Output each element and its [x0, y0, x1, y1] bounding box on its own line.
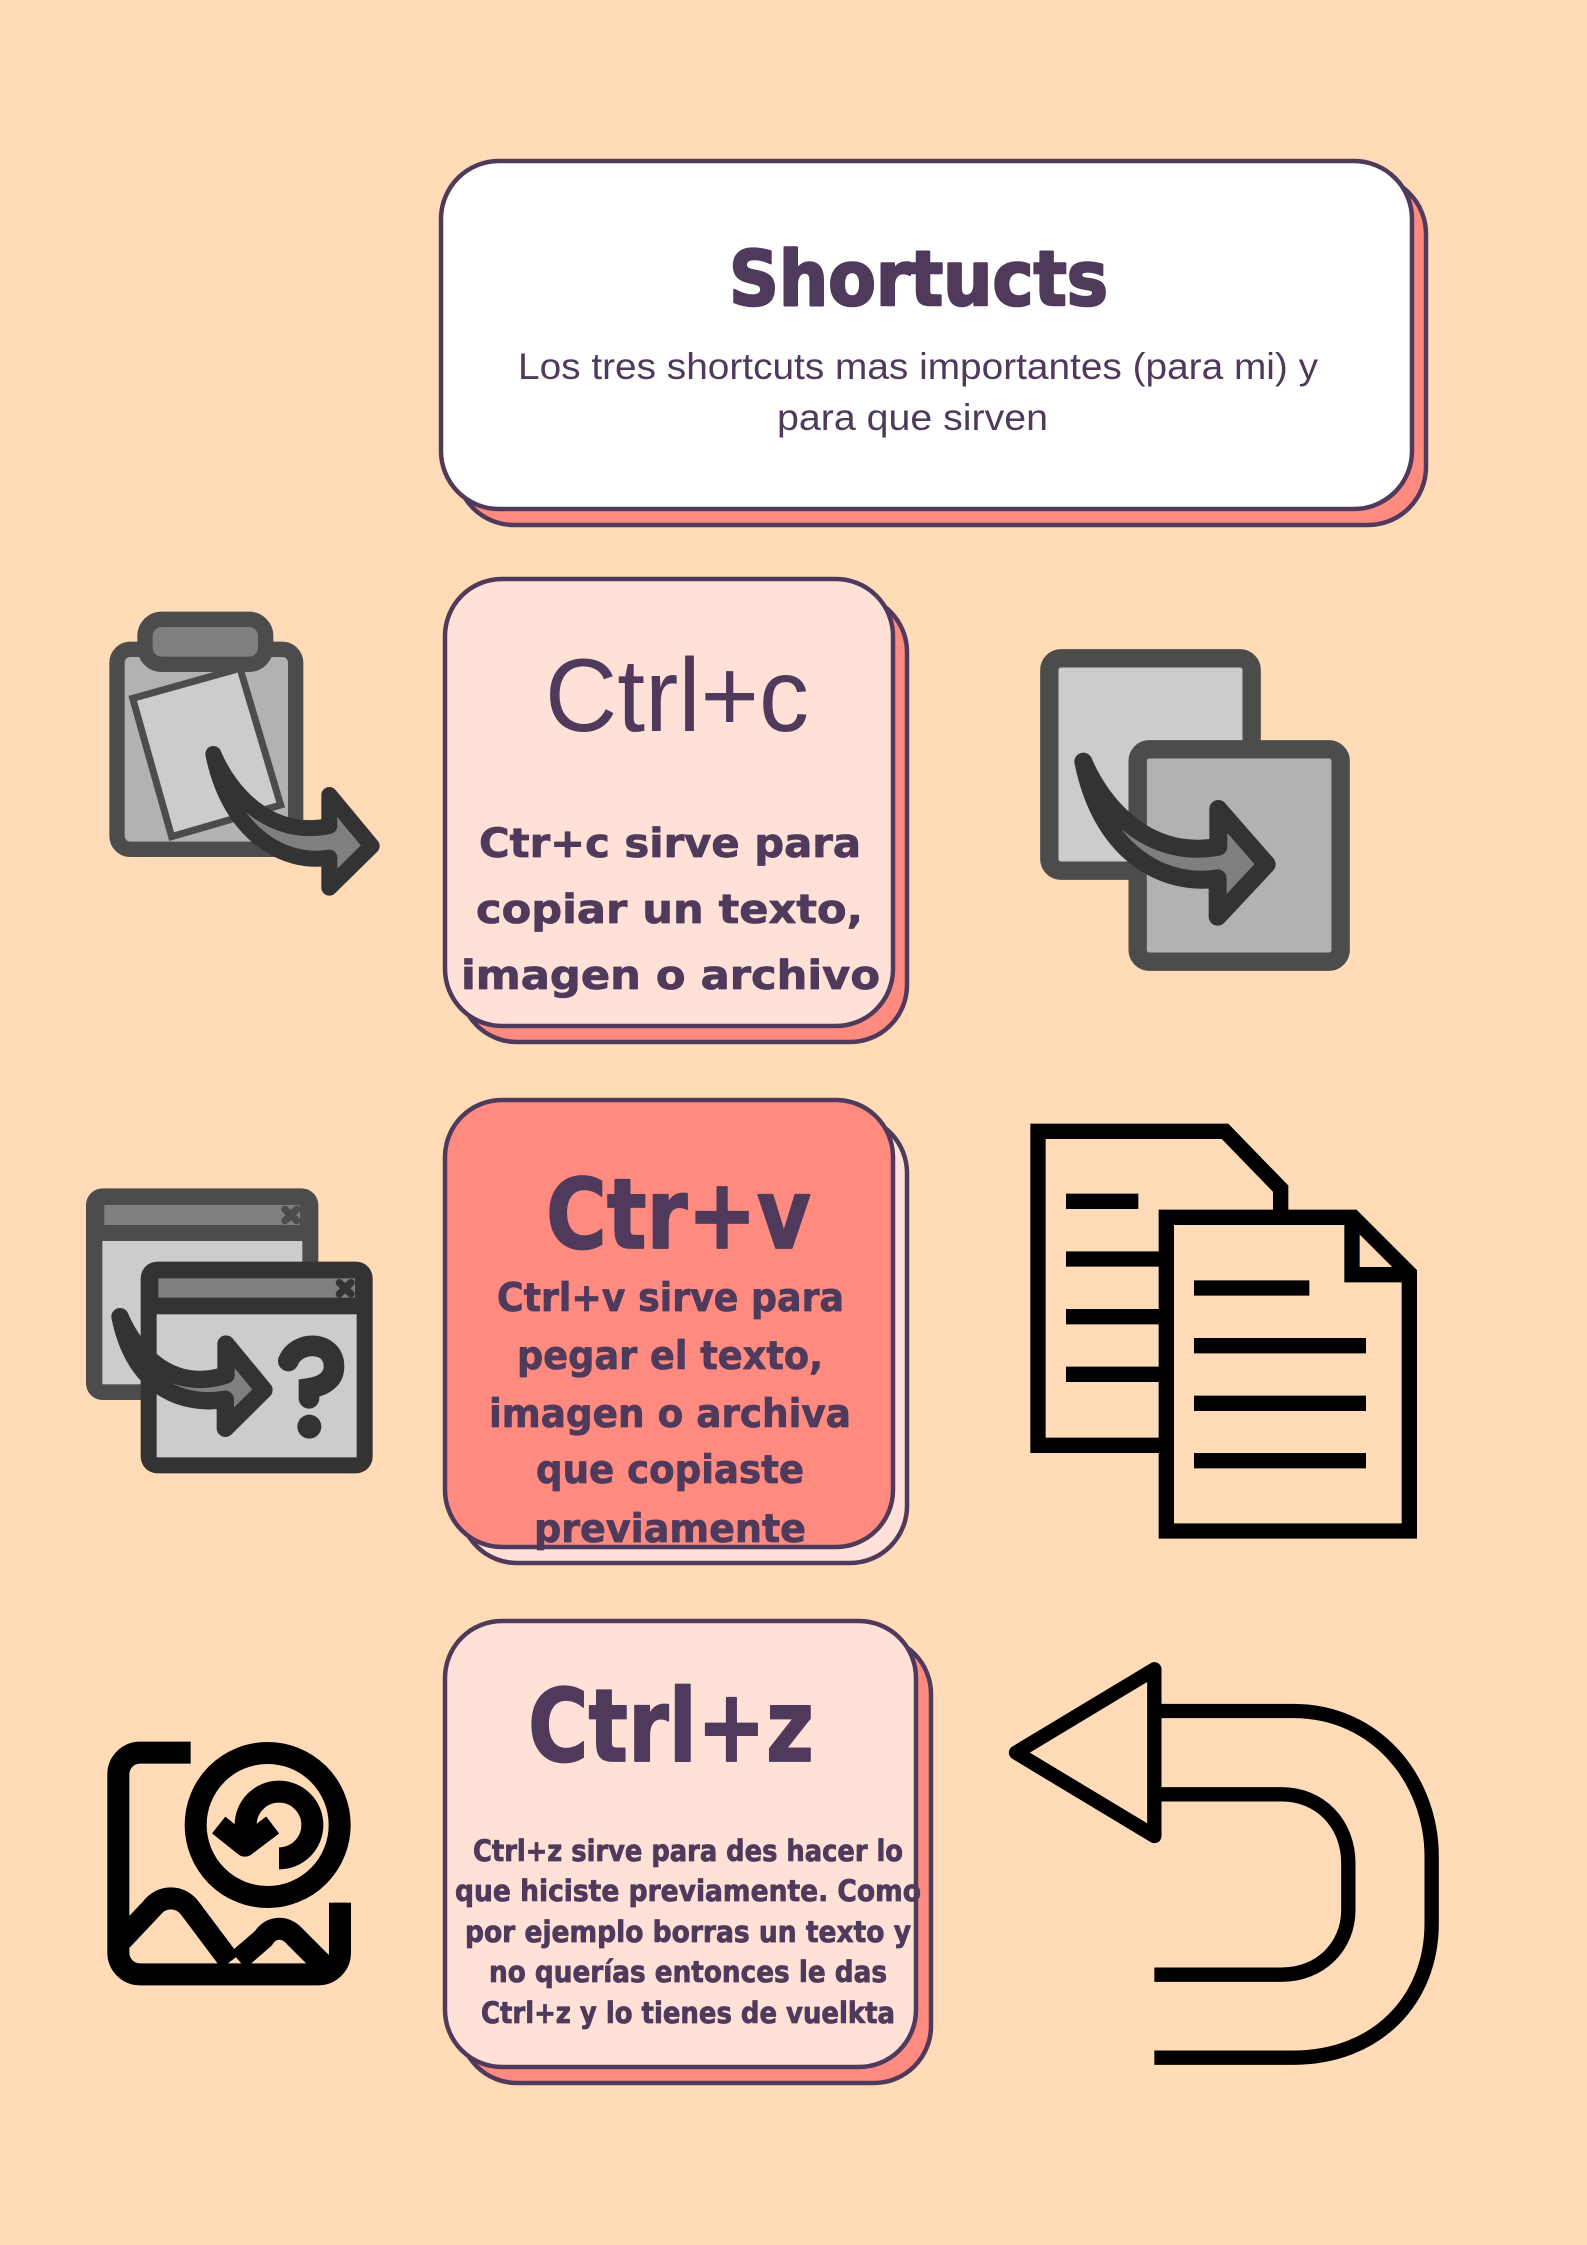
body text: Ctrl+v: imagen o archiva: [489, 1392, 851, 1437]
body text: Ctrl+z: que hiciste previamente. Como: [455, 1874, 921, 1908]
icon: image with undo circle: [118, 1753, 340, 1974]
body text: Ctrl+c: Ctr+c sirve para: [479, 821, 861, 867]
body text: Ctrl+z: Ctrl+z sirve para des hacer lo: [473, 1834, 903, 1868]
heading: Ctrl+c: Ctrl+c: [545, 638, 809, 754]
subtitle text: para que sirven: [777, 397, 1048, 438]
body text: Ctrl+z: no querías entonces le das: [489, 1955, 887, 1989]
icon: duplicate squares with arrow: [1049, 658, 1341, 962]
heading: Shortucts: Shortucts: [729, 234, 1108, 323]
body text: Ctrl+v: Ctrl+v sirve para: [497, 1276, 844, 1321]
icon: clipboard with arrow: [117, 619, 372, 888]
panel: Ctrl+v card: [445, 1100, 907, 1563]
panel: title card: [441, 161, 1426, 525]
body text: Ctrl+z: Ctrl+z y lo tienes de vuelkta: [481, 1996, 895, 2030]
body text: Ctrl+c: copiar un texto,: [476, 887, 863, 933]
heading: Ctrl+z: Ctrl+z: [528, 1667, 814, 1785]
heading: Ctr+v: Ctr+v: [546, 1158, 811, 1271]
body text: Ctrl+z: [455, 1834, 921, 2030]
subtitle text: [518, 346, 1319, 438]
subtitle text: Los tres shortcuts mas importantes (para mi) y: [518, 346, 1319, 387]
panel: Ctrl+c card: [445, 579, 907, 1042]
icon: undo arrow: [1016, 1669, 1432, 2058]
body text: Ctrl+c: imagen o archivo: [461, 953, 880, 999]
icon: windows with arrow and question mark: [86, 1188, 373, 1473]
body text: Ctrl+v: que copiaste: [536, 1448, 804, 1493]
body text: Ctrl+v: pegar el texto,: [517, 1334, 823, 1379]
body text: Ctrl+c: [461, 821, 880, 999]
body text: Ctrl+v: [489, 1276, 851, 1552]
body text: Ctrl+z: por ejemplo borras un texto y: [465, 1915, 911, 1949]
body text: Ctrl+v: previamente: [534, 1507, 806, 1552]
panel: Ctrl+z card: [445, 1621, 931, 2083]
icon: two documents: [1038, 1131, 1409, 1531]
